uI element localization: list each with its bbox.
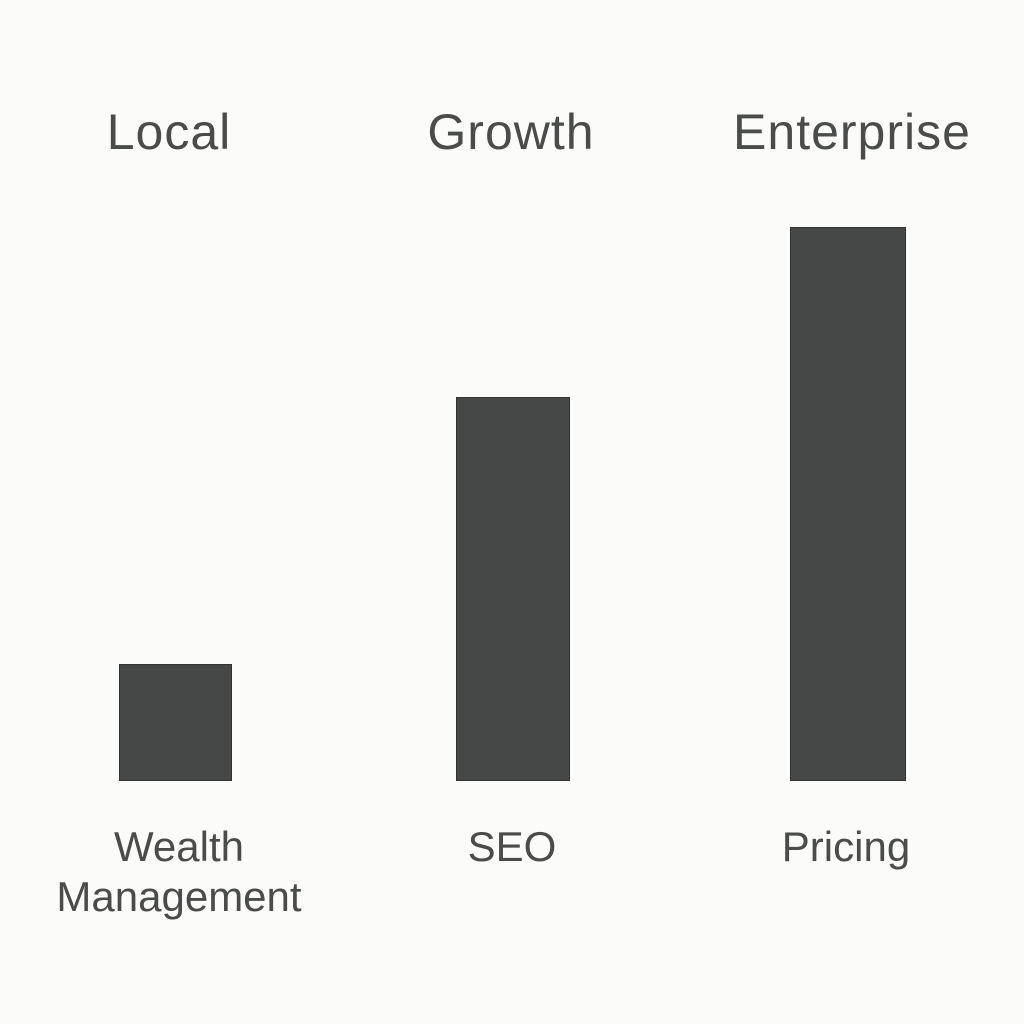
label: SEO: SEO (468, 823, 556, 870)
bar: Enterprise (790, 227, 906, 781)
heading: Enterprise: Enterprise (733, 104, 971, 160)
heading: Local: Local (107, 104, 231, 160)
bar: Growth (456, 397, 570, 781)
label: Wealth Management (56, 823, 302, 920)
label: Wealth Management: Wealth (114, 823, 244, 870)
heading: Growth: Growth (427, 104, 595, 160)
bar: Local (119, 664, 232, 781)
label: Wealth Management: Management (56, 873, 302, 920)
label: Pricing: Pricing (782, 823, 910, 870)
